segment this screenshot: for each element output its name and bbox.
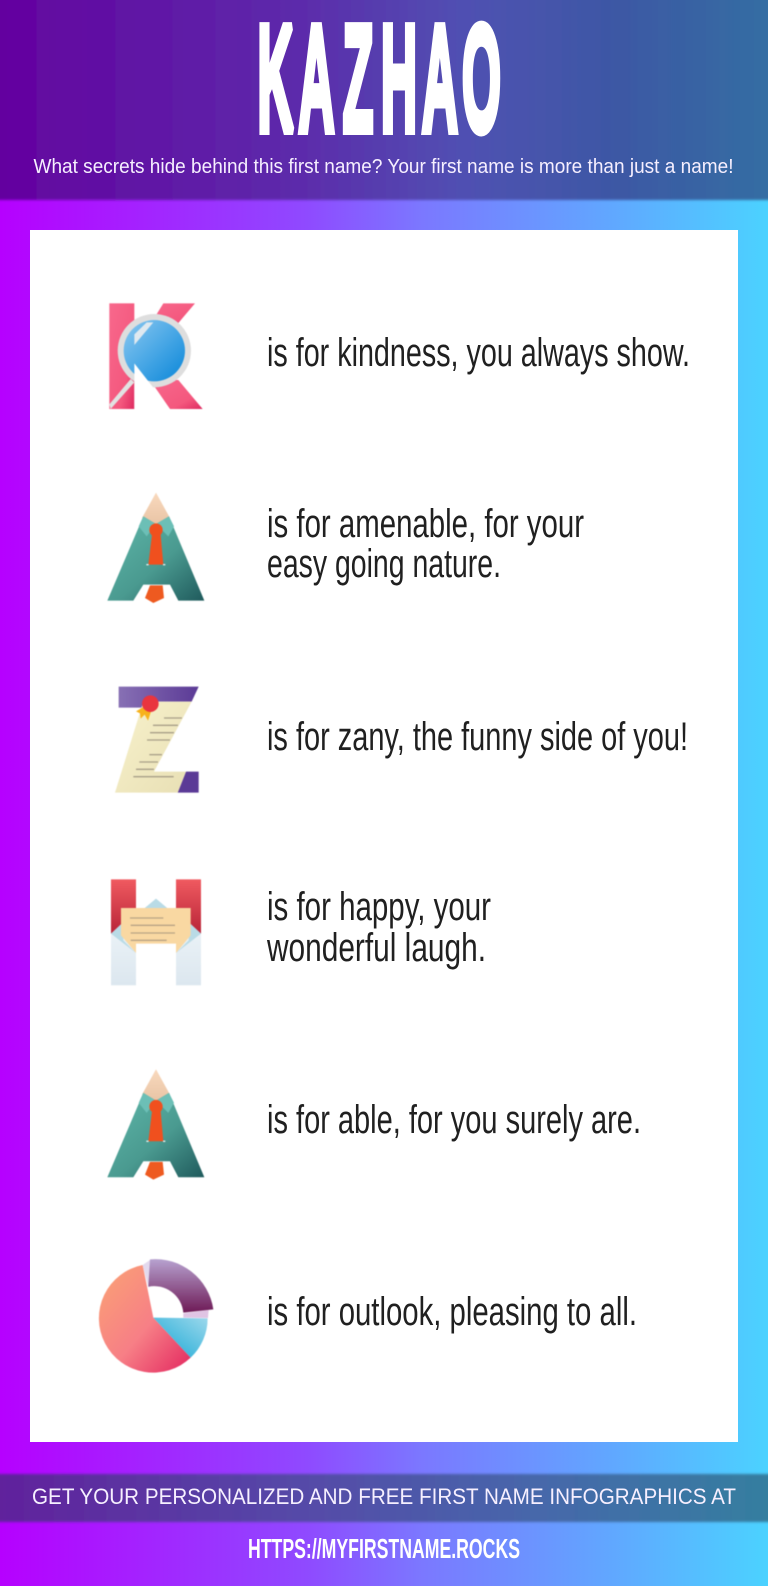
text: H line: is for happy, your [267, 885, 491, 929]
footer band [0, 1474, 768, 1522]
text: A line: easy going nature. [267, 542, 501, 586]
text: A line: is for amenable, for your [267, 502, 584, 546]
icon: letter O as pie chart [99, 1259, 213, 1373]
subtitle: What secrets hide behind this first name? Your first name is more than just a name! [34, 155, 734, 178]
row 5: A [107, 1069, 641, 1180]
row 1: K [109, 303, 690, 409]
text: A line [267, 502, 584, 586]
icon: letter A with suit and tie [107, 1069, 204, 1180]
icon: letter A with suit and tie [107, 493, 204, 603]
row 6: O [99, 1259, 637, 1373]
text: H line [266, 885, 491, 970]
text: O line: is for outlook, pleasing to all. [267, 1290, 637, 1334]
header band [0, 0, 768, 200]
icon: letter H as envelope [111, 879, 201, 985]
footer URL: HTTPS://MYFIRSTNAME.ROCKS [248, 1533, 520, 1564]
text: H line: wonderful laugh. [266, 926, 486, 970]
row 3: Z [115, 687, 688, 793]
white content panel [30, 230, 738, 1442]
row 2: A [107, 493, 584, 603]
icon: letter K with magnifying glass [109, 303, 203, 409]
icon: letter Z as certificate [115, 687, 199, 793]
row 4: H [111, 879, 491, 985]
text: A line: is for able, for you surely are. [267, 1098, 641, 1142]
